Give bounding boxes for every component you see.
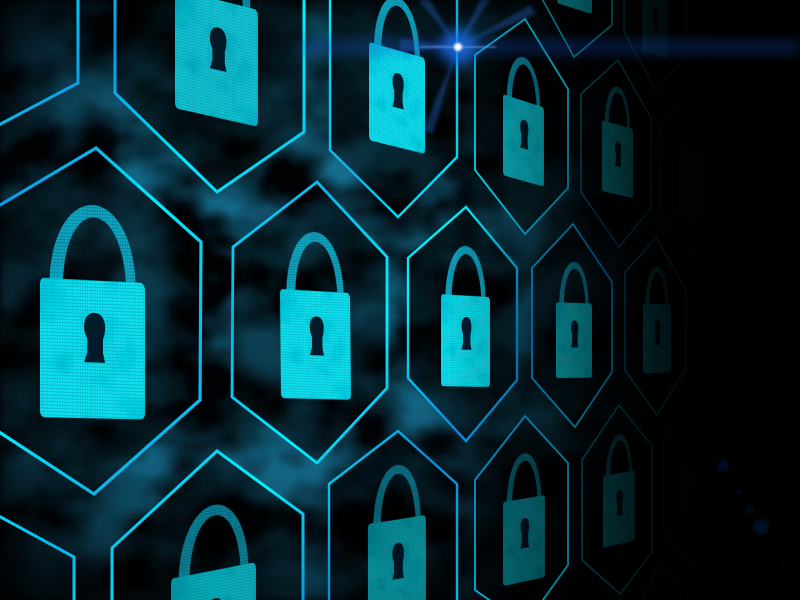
padlock <box>369 0 425 155</box>
padlock <box>557 0 592 15</box>
padlock <box>441 245 490 388</box>
hexagon and lock: bottom second <box>112 451 303 600</box>
hexagon and lock: upper row third <box>475 19 568 234</box>
hexagon and lock: middle second <box>232 182 387 463</box>
hexagon: bottom edge sixth <box>640 565 687 600</box>
lens flare <box>300 0 800 134</box>
padlock <box>171 496 256 600</box>
hexagon and lock: middle third <box>408 207 517 441</box>
padlock <box>175 0 258 128</box>
padlock <box>368 460 426 600</box>
padlock <box>602 82 633 199</box>
padlock <box>603 431 635 548</box>
hexagon and lock: upper row fourth <box>581 60 651 247</box>
padlock <box>642 0 668 59</box>
padlock <box>643 266 671 374</box>
hexagon and lock: middle fourth <box>532 224 612 427</box>
hexagon and lock: top edge fourth <box>624 0 686 90</box>
hexagon: top-left corner <box>0 0 78 127</box>
padlock <box>503 51 544 188</box>
padlock <box>279 231 351 401</box>
hexagon and lock: top <box>115 0 304 192</box>
hexagon and lock: top centre <box>330 0 457 217</box>
hexagon and lock: bottom fourth <box>475 416 568 600</box>
padlock <box>556 262 592 378</box>
cloud haze <box>0 0 616 600</box>
hexagon and lock: bottom sixth <box>663 398 715 565</box>
padlock <box>503 449 545 586</box>
hexagon and lock: bottom third <box>329 431 457 600</box>
hexagon and lock: upper row fifth <box>661 93 715 256</box>
hexagon and lock: top edge third <box>540 0 612 57</box>
hexagon and lock: bottom fifth <box>582 405 652 594</box>
padlock <box>40 203 145 421</box>
hexagon and lock: large left <box>0 148 201 494</box>
padlock <box>678 114 702 222</box>
bokeh dots <box>717 460 785 564</box>
padlock <box>680 428 704 517</box>
hexagon: bottom-left corner <box>0 514 74 600</box>
hexagon and lock: middle fifth <box>625 238 686 415</box>
